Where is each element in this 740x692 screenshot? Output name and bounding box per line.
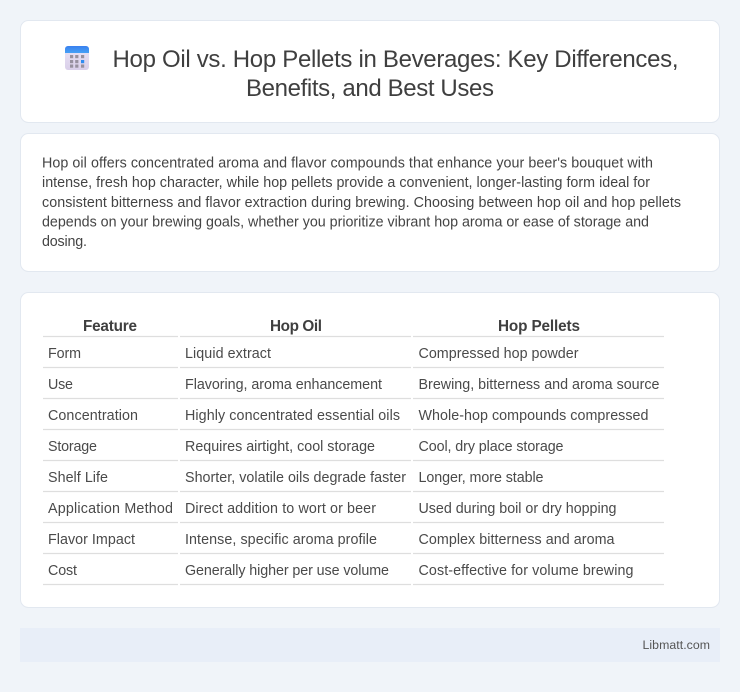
table rows: Used during boil or dry hopping	[418, 501, 617, 517]
table rows: Generally higher per use volume	[185, 563, 389, 579]
table rows: Form	[48, 346, 81, 362]
table rows: Longer, more stable	[418, 470, 544, 486]
summary paragraph: Hop oil offers concentrated aroma and flavor compounds that enhance your beer's bouquet with	[42, 156, 653, 172]
panel: comparison table	[20, 292, 720, 608]
table rows: Storage	[48, 439, 97, 455]
panel: header	[20, 20, 720, 122]
table header: Hop Oil	[270, 318, 322, 335]
summary paragraph: depends on your brewing goals, whether you prioritize vibrant hop aroma or ease of storage and	[42, 214, 649, 230]
table rows	[43, 336, 664, 584]
table rows: Highly concentrated essential oils	[185, 408, 400, 424]
footer	[20, 628, 720, 662]
summary paragraph: consistent bitterness and flavor extraction during brewing. Choosing between hop oil and hop pellets	[42, 195, 681, 211]
summary paragraph: dosing.	[42, 234, 87, 250]
title	[112, 46, 678, 102]
table rows: Brewing, bitterness and aroma source	[418, 377, 660, 393]
table rows: Requires airtight, cool storage	[185, 439, 375, 455]
table rows: Cost	[48, 563, 77, 579]
footer credit: Libmatt.com	[642, 638, 710, 652]
table rows: Shelf Life	[48, 470, 108, 486]
table rows: Direct addition to wort or beer	[185, 501, 376, 517]
table rows: Liquid extract	[185, 346, 271, 362]
table rows: Intense, specific aroma profile	[185, 532, 377, 548]
title: Benefits, and Best Uses	[246, 75, 494, 102]
table rows: Use	[48, 377, 73, 393]
table rows: Application Method	[48, 501, 173, 517]
summary paragraph	[42, 156, 681, 250]
table rows: Complex bitterness and aroma	[418, 532, 615, 548]
table rows: Whole-hop compounds compressed	[418, 408, 649, 424]
icon: calendar grid	[65, 46, 89, 70]
title: Hop Oil vs. Hop Pellets in Beverages: Key Differences,	[112, 46, 678, 73]
table rows: Shorter, volatile oils degrade faster	[185, 470, 406, 486]
table rows: Compressed hop powder	[418, 346, 579, 362]
table rows: Cost-effective for volume brewing	[418, 563, 634, 579]
panel: summary text	[20, 134, 720, 272]
table rows: Concentration	[48, 408, 138, 424]
table rows: Flavoring, aroma enhancement	[185, 377, 382, 393]
table header: Hop Pellets	[498, 318, 580, 335]
table header	[83, 318, 580, 335]
summary paragraph: intense, fresh hop character, while hop pellets provide a convenient, longer-lasting form ideal for	[42, 175, 650, 191]
table rows: Flavor Impact	[48, 532, 135, 548]
table rows: Cool, dry place storage	[418, 439, 564, 455]
table header: Feature	[83, 318, 137, 335]
